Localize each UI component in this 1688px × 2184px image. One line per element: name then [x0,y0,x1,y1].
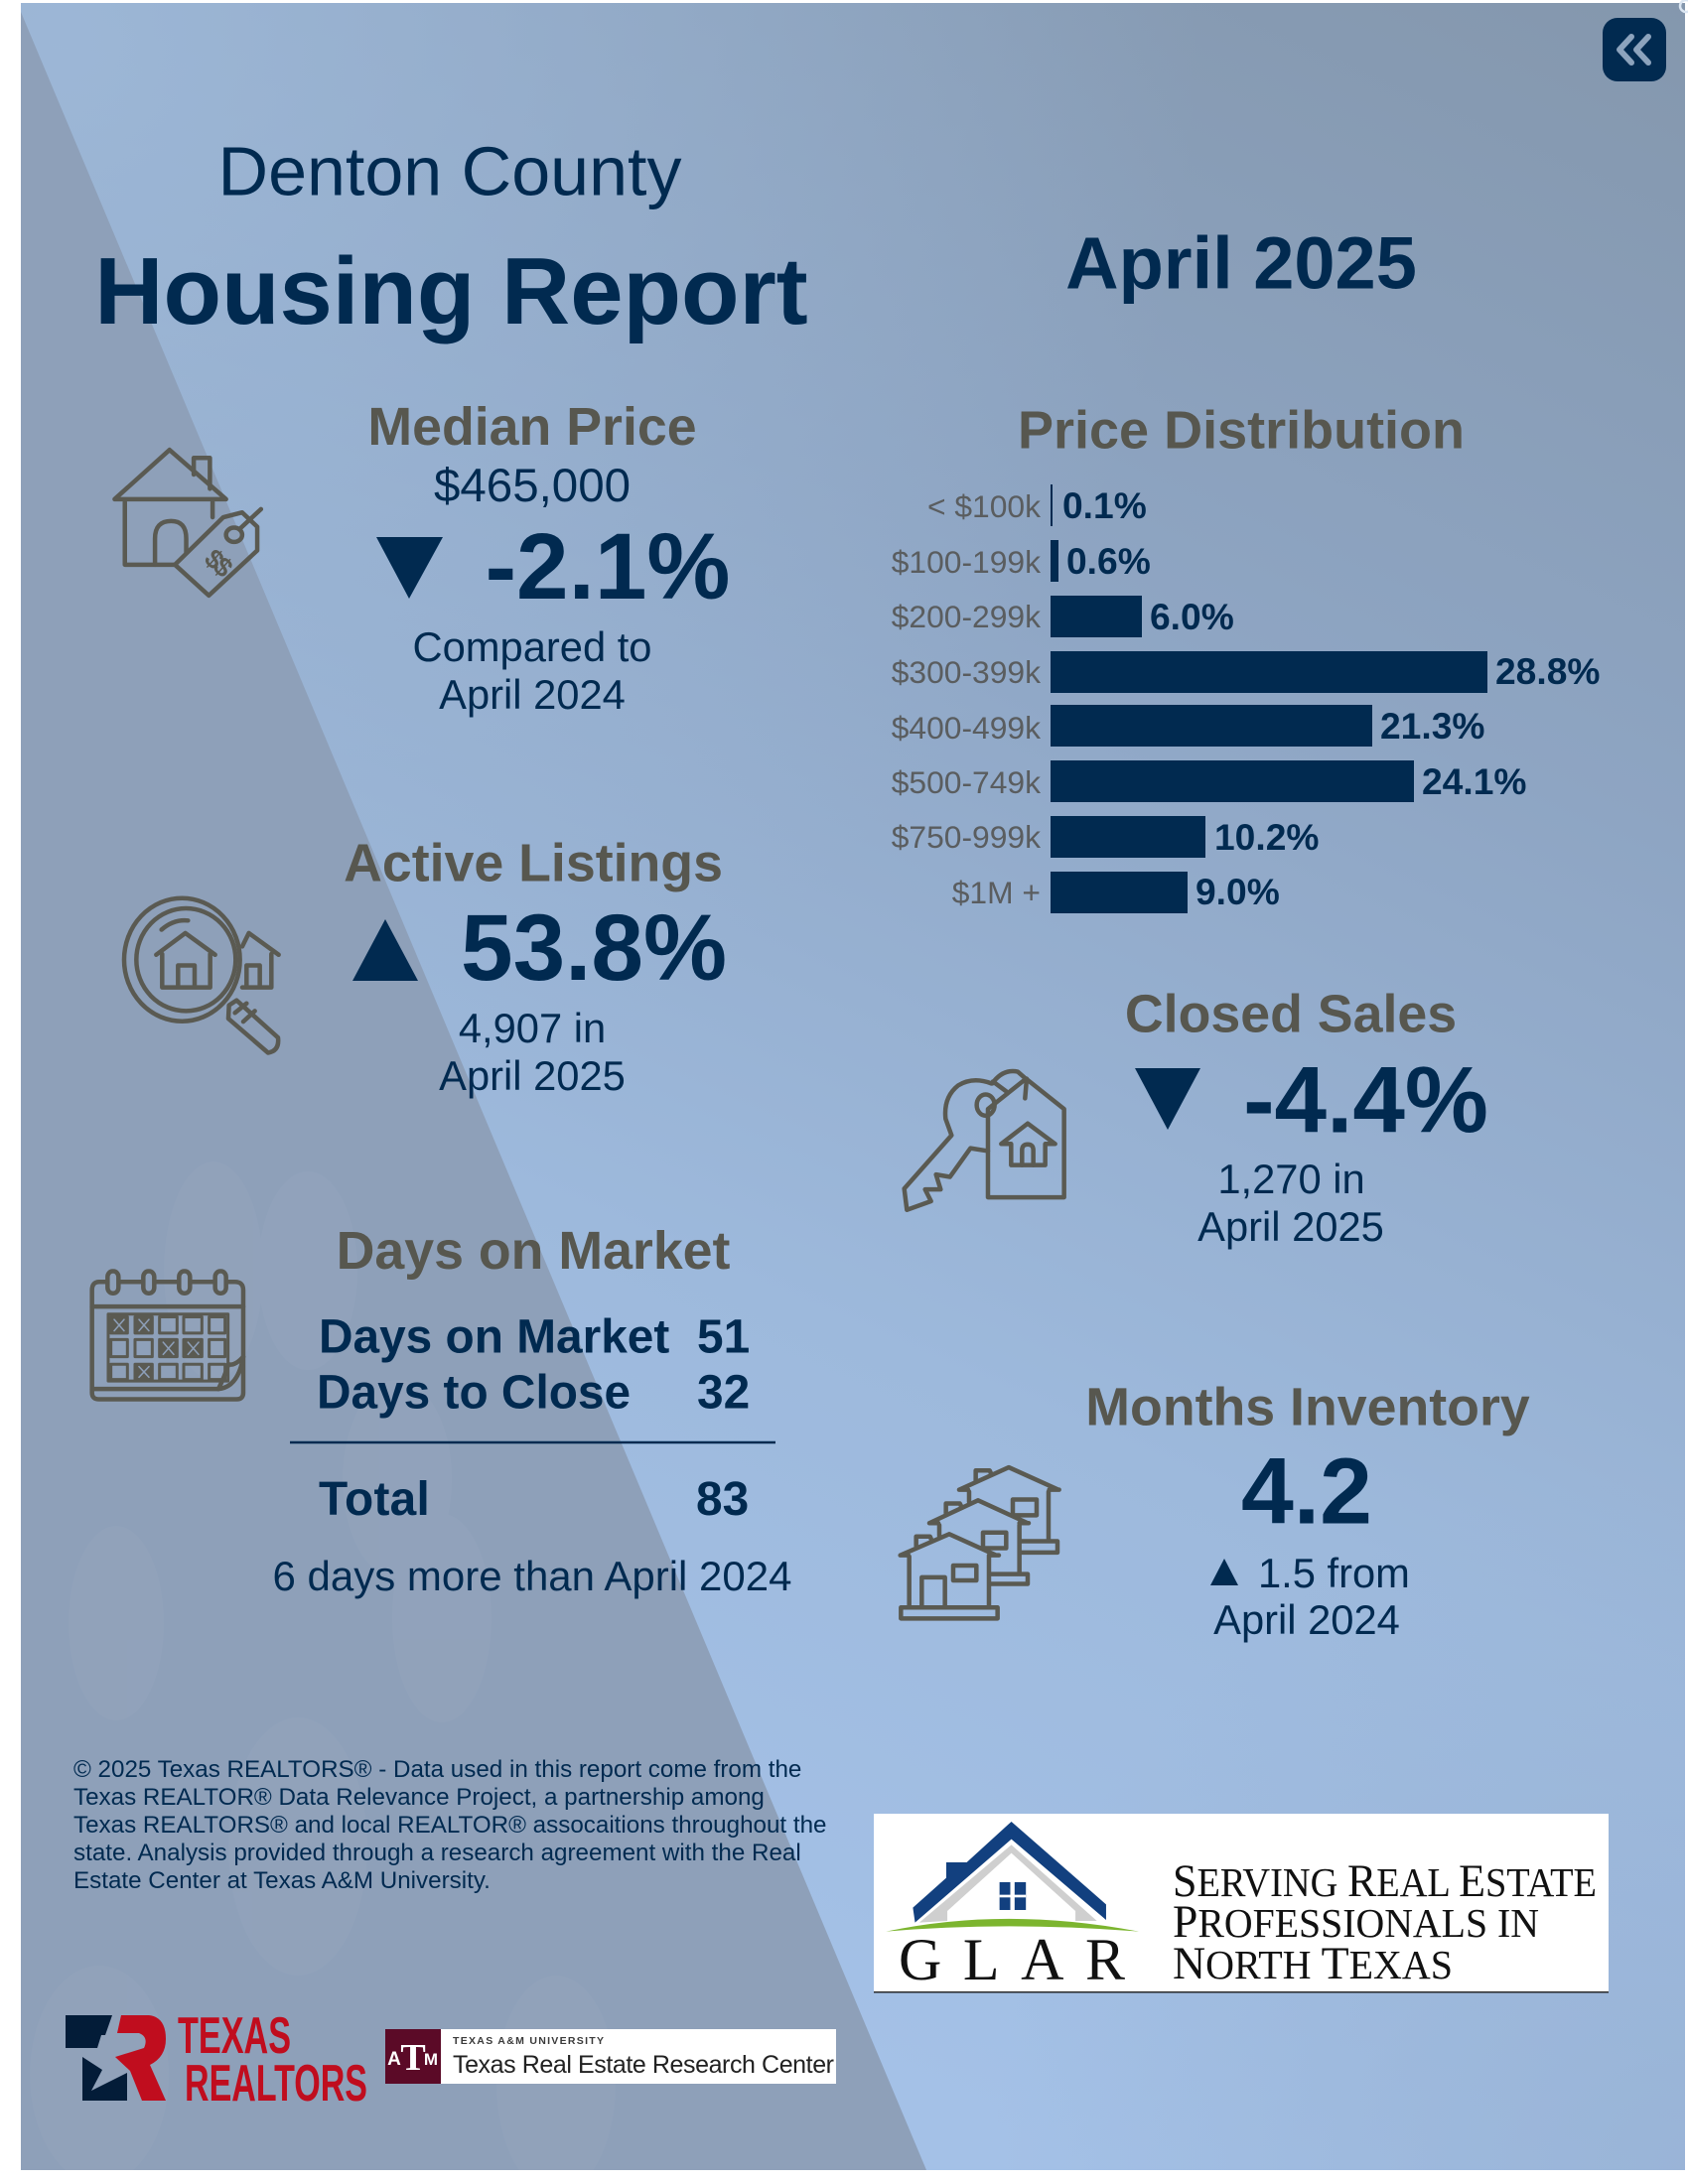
table: days rows: 83 [696,1473,749,1526]
logo: Texas Realtors: TEXAS [178,2007,291,2065]
logo: GLAR: NORTH TEXAS [1173,1938,1453,1989]
panel: active listings: April 2025 [439,1052,626,1099]
panel: median price: Compared to [413,623,651,670]
logo: Texas Realtors [66,2007,367,2113]
bar chart: $100-199k [892,544,1041,580]
logo: Texas A&M Real Estate Research Center: Texas Real Estate Research Center [453,2051,834,2079]
bar chart: 28.8% [1495,650,1600,692]
footer disclaimer text: Estate Center at Texas A&M University. [73,1867,491,1894]
footer disclaimer text: © 2025 Texas REALTORS® - Data used in this report come from the [73,1756,801,1783]
logo: GLAR: PROFESSIONALS IN [1173,1896,1539,1948]
logo: Texas A&M Real Estate Research Center: M [424,2050,438,2069]
table: days rows [290,1310,775,1526]
title [94,133,808,344]
arrow: up small [1210,1559,1238,1585]
bar chart: 9.0% [1196,871,1280,912]
table: days rows: Days to Close [317,1366,631,1420]
panel: median price: -2.1% [486,514,730,619]
panel: median price [114,397,730,718]
panel: median price: April 2024 [439,671,626,718]
panel: months inventory: 4.2 [1241,1439,1372,1545]
panel: active listings [124,834,727,1099]
logo: GLAR: GLAR [899,1927,1125,1992]
bar chart: $750-999k [892,819,1041,855]
bar chart: < $100k [927,488,1041,524]
panel: closed sales: Closed Sales [1125,985,1457,1044]
icon: row of houses [901,1467,1059,1618]
corner ring mark [1680,0,1688,12]
footer disclaimer text: state. Analysis provided through a research agreement with the Real [73,1840,801,1866]
footer disclaimer text: Texas REALTORS® and local REALTOR® assocaitions throughout the [73,1812,827,1839]
table: days rows: Days on Market [319,1310,669,1364]
logo: GLAR: SERVING REAL ESTATE [1173,1855,1597,1907]
table: days rows: 32 [697,1366,750,1420]
icon: magnifier over house [124,898,279,1052]
bar chart: 0.6% [1066,540,1151,582]
bar chart: 0.1% [1062,484,1147,526]
bar chart: $1M + [952,875,1041,910]
panel: days on market [92,1221,792,1599]
footer disclaimer text [73,1756,827,1894]
table: days rows: 51 [697,1310,750,1364]
icon: calendar [92,1272,243,1400]
icon: key with house tag [905,1071,1064,1210]
panel: active listings: 4,907 in [459,1005,606,1051]
logo: Texas A&M Real Estate Research Center [385,2029,836,2084]
bar chart: 24.1% [1422,760,1526,802]
bar chart: $500-749k [892,764,1041,800]
bar chart: 10.2% [1214,816,1319,858]
arrow: up [352,919,418,981]
icon: house with price tag: $$ [199,543,238,583]
panel: median price: $465,000 [434,460,631,512]
bar chart: $300-399k [892,654,1041,690]
bar chart: $400-499k [892,710,1041,746]
arrow: down [376,537,443,599]
panel: days on market: Days on Market [337,1221,731,1281]
logo: Texas A&M Real Estate Research Center: A [387,2049,401,2070]
panel: months inventory: April 2024 [1213,1596,1400,1643]
logo: Texas A&M Real Estate Research Center: TEXAS A&M UNIVERSITY [453,2035,604,2047]
panel: price distribution: Price Distribution [1018,401,1465,461]
panel: closed sales: -4.4% [1243,1048,1488,1154]
logo: Texas A&M Real Estate Research Center: T [400,2037,426,2079]
icon: house with price tag [114,450,261,596]
panel: closed sales: 1,270 in [1217,1156,1365,1202]
bar chart [892,484,1600,913]
title: Housing Report [94,238,808,344]
panel: months inventory [901,1378,1530,1643]
logo: GLAR [874,1814,1609,1993]
bar chart: 6.0% [1150,596,1234,637]
title: Denton County [218,133,681,210]
table: days rows: Total [319,1473,430,1526]
panel: active listings: Active Listings [344,834,723,893]
panel: months inventory: 1.5 from [1258,1550,1410,1596]
panel: closed sales: April 2025 [1197,1203,1384,1250]
panel: price distribution [892,401,1600,913]
bar chart: 21.3% [1380,705,1484,747]
dark diagonal panel [21,12,926,2184]
back button icon [1603,18,1666,81]
report date: April 2025 [1065,222,1417,304]
panel: days on market: 6 days more than April 2024 [272,1553,792,1599]
footer disclaimer text: Texas REALTOR® Data Relevance Project, a partnership among [73,1784,765,1811]
panel: median price: Median Price [367,397,697,457]
panel: active listings: 53.8% [461,895,727,1001]
panel: closed sales [905,985,1488,1250]
arrow: down [1135,1068,1200,1130]
bar chart: $200-299k [892,599,1041,634]
panel: months inventory: Months Inventory [1085,1378,1530,1437]
logo: Texas Realtors: REALTORS [185,2055,367,2113]
